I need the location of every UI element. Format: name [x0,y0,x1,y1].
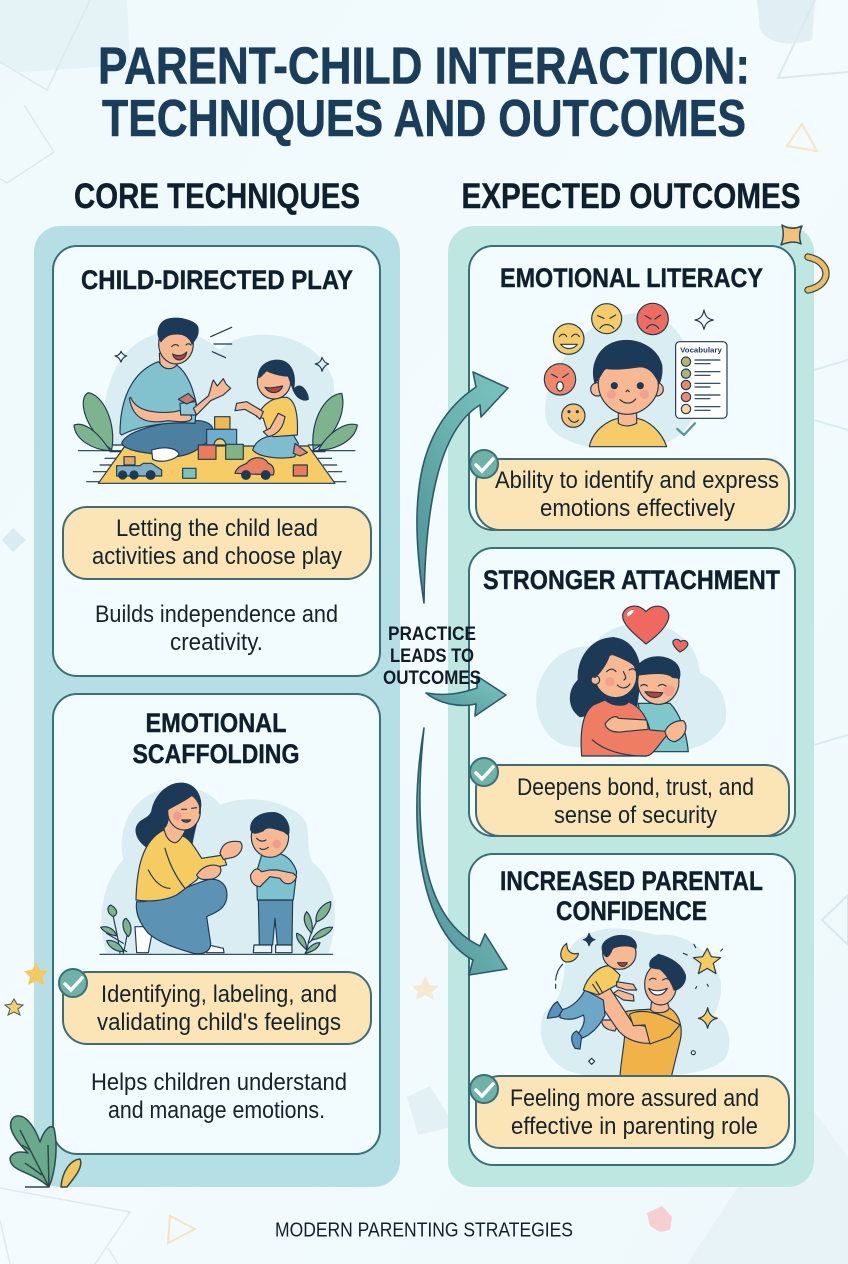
benefit text: Builds independence and [95,601,338,628]
callout: what it is: sense of security [554,802,717,829]
callout: what it is: Deepens bond, trust, and [517,774,754,801]
card heading: SCAFFOLDING [132,739,300,769]
card heading: INCREASED PARENTAL [500,866,763,896]
title: PARENT-CHILD INTERACTION: [98,38,750,96]
benefit text: Helps children understand [91,1069,347,1096]
check badge [470,1075,498,1103]
child head [603,937,636,969]
blocks [215,417,230,429]
callout: what it is: Letting the child lead [116,515,318,542]
benefit text: and manage emotions. [108,1097,325,1124]
decorative star and moon, upper right [781,225,826,290]
card: increased parental confidence [469,854,795,1165]
illustration: parent comforting child [100,783,335,954]
check badge [470,450,498,478]
card: emotional scaffolding [53,694,380,1154]
card heading [132,708,300,769]
arrow label: OUTCOMES [383,668,481,689]
vocabulary label: Vocabulary [680,345,723,354]
illustration: parent and child playing with blocks [74,318,357,483]
callout: what it is [476,459,789,530]
check badge [470,758,498,786]
illustration: child with emotion faces and vocabulary list [544,303,727,447]
check badge [59,969,87,997]
card heading: CONFIDENCE [556,896,707,926]
toy truck [124,457,135,465]
callout: what it is: Feeling more assured and [510,1085,759,1112]
callout: what it is: Identifying, labeling, and [101,981,337,1008]
card: stronger attachment [469,548,795,836]
child legs [560,990,605,1038]
arrow label: PRACTICE [388,624,476,645]
callout: what it is: validating child's feelings [97,1009,341,1036]
callout: what it is [63,507,371,579]
toy car [235,458,274,475]
callout: what it is: activities and choose play [92,543,342,570]
panel: expected outcomes background [448,226,814,1187]
child shirt and arms [583,966,620,995]
illustration: parent and child hugging [536,606,726,756]
mother sweater [136,829,227,901]
illustration: parent lifting child [541,928,729,1076]
footer: MODERN PARENTING STRATEGIES [275,1218,573,1242]
panel: core techniques background [34,226,400,1187]
father neck and head [651,1000,669,1013]
arrow label: LEADS TO [390,646,474,667]
boy [258,900,293,945]
card heading [500,866,763,926]
benefit text [91,1069,347,1124]
card: child-directed play [53,246,380,676]
callout: what it is [63,972,371,1044]
arrow: to increased parental confidence [417,728,507,975]
callout: what it is [476,765,789,836]
girl [253,435,298,458]
title [98,38,750,148]
callout: what it is: emotions effectively [540,495,735,522]
callout: what it is: effective in parenting role [511,1113,758,1140]
card heading: EMOTIONAL LITERACY [500,263,763,293]
father arm and sleeve [593,984,650,1043]
benefit text: creativity. [170,629,263,656]
decorative stars, lower left [5,963,48,1015]
heading: core techniques: CORE TECHNIQUES [74,177,360,216]
arrow: to emotional literacy [417,372,508,603]
card heading: EMOTIONAL [146,708,286,738]
arrow: to stronger attachment [426,676,506,716]
card: emotional literacy [469,246,795,530]
father [122,421,213,457]
card heading: CHILD-DIRECTED PLAY [81,265,353,295]
mother jeans [136,879,227,954]
card heading: STRONGER ATTACHMENT [483,565,780,595]
arrow label [383,624,481,689]
callout: what it is: Ability to identify and express [495,467,779,494]
benefit text [95,601,338,656]
decorative leaves, lower left [10,1116,81,1187]
callout: what it is [476,1076,789,1148]
mother hair [136,783,201,850]
father shirt [620,1008,681,1076]
